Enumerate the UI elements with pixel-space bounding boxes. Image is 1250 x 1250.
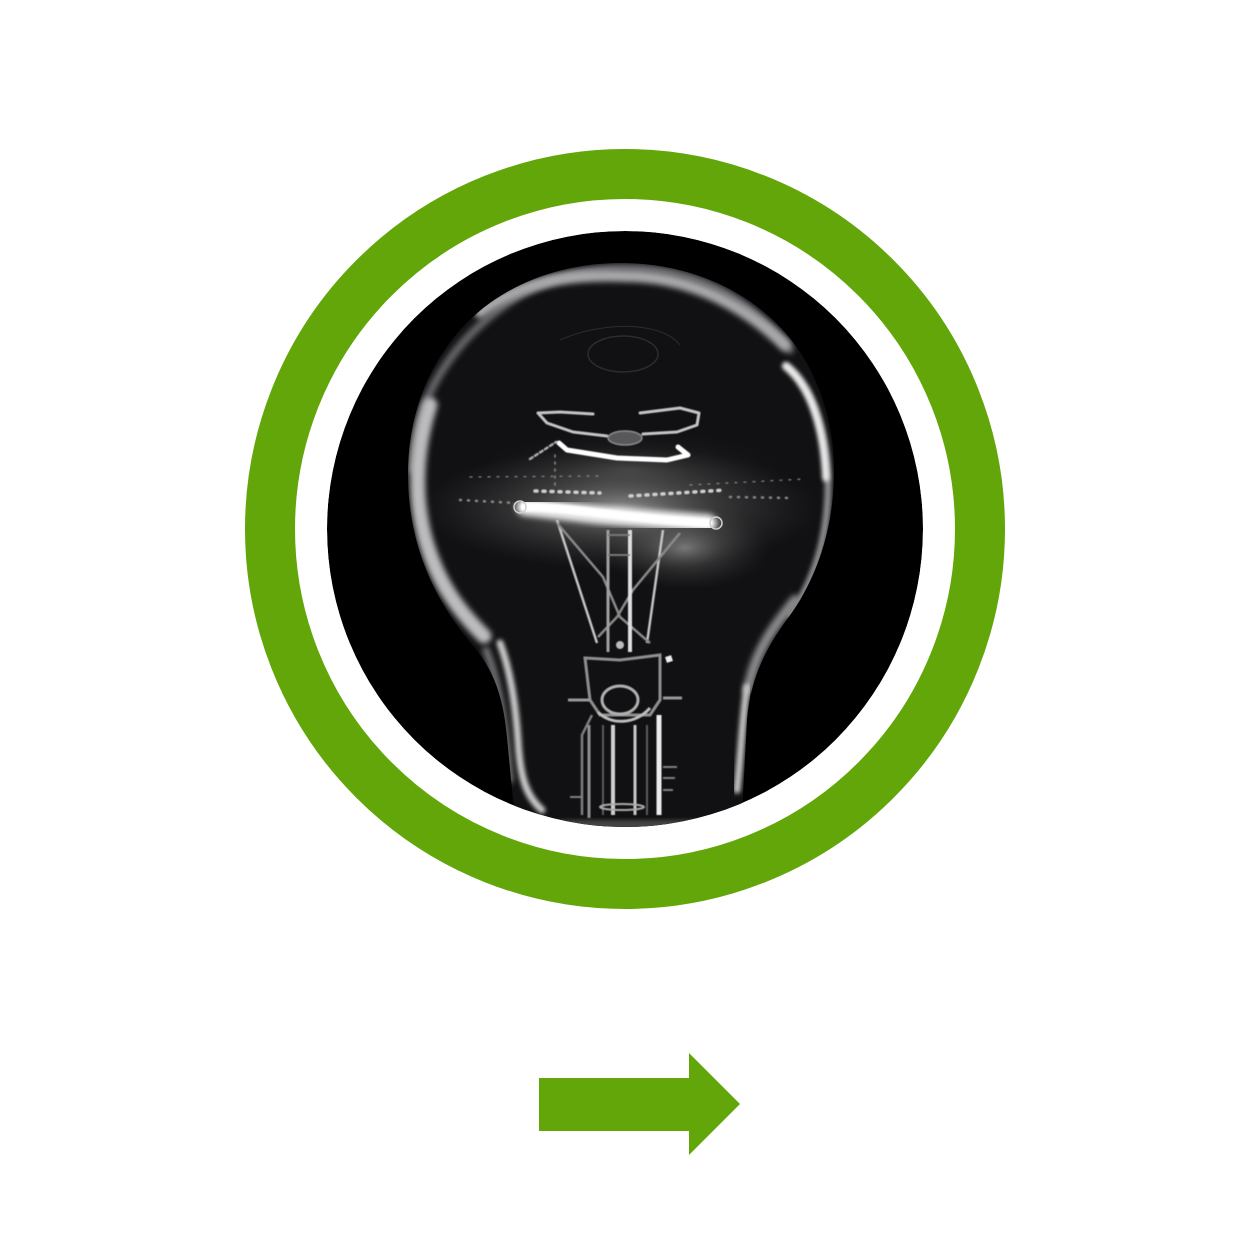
- glow band: [450, 456, 790, 560]
- light bulb glass: [400, 255, 845, 845]
- glass press: [585, 655, 660, 715]
- wire stubs: [568, 698, 682, 700]
- upper filament: [538, 408, 699, 460]
- arrow: [539, 1053, 740, 1155]
- dust specks: [460, 442, 805, 503]
- top swirl mark: [560, 326, 680, 372]
- black photo circle with light bulb: [327, 231, 923, 845]
- stem and support wires: [557, 520, 682, 818]
- bulb rim highlights: [412, 268, 828, 810]
- main filament: [514, 501, 722, 529]
- green ring: [270, 174, 980, 884]
- exhaust tube: [582, 715, 592, 815]
- infographic canvas: [245, 149, 1005, 1155]
